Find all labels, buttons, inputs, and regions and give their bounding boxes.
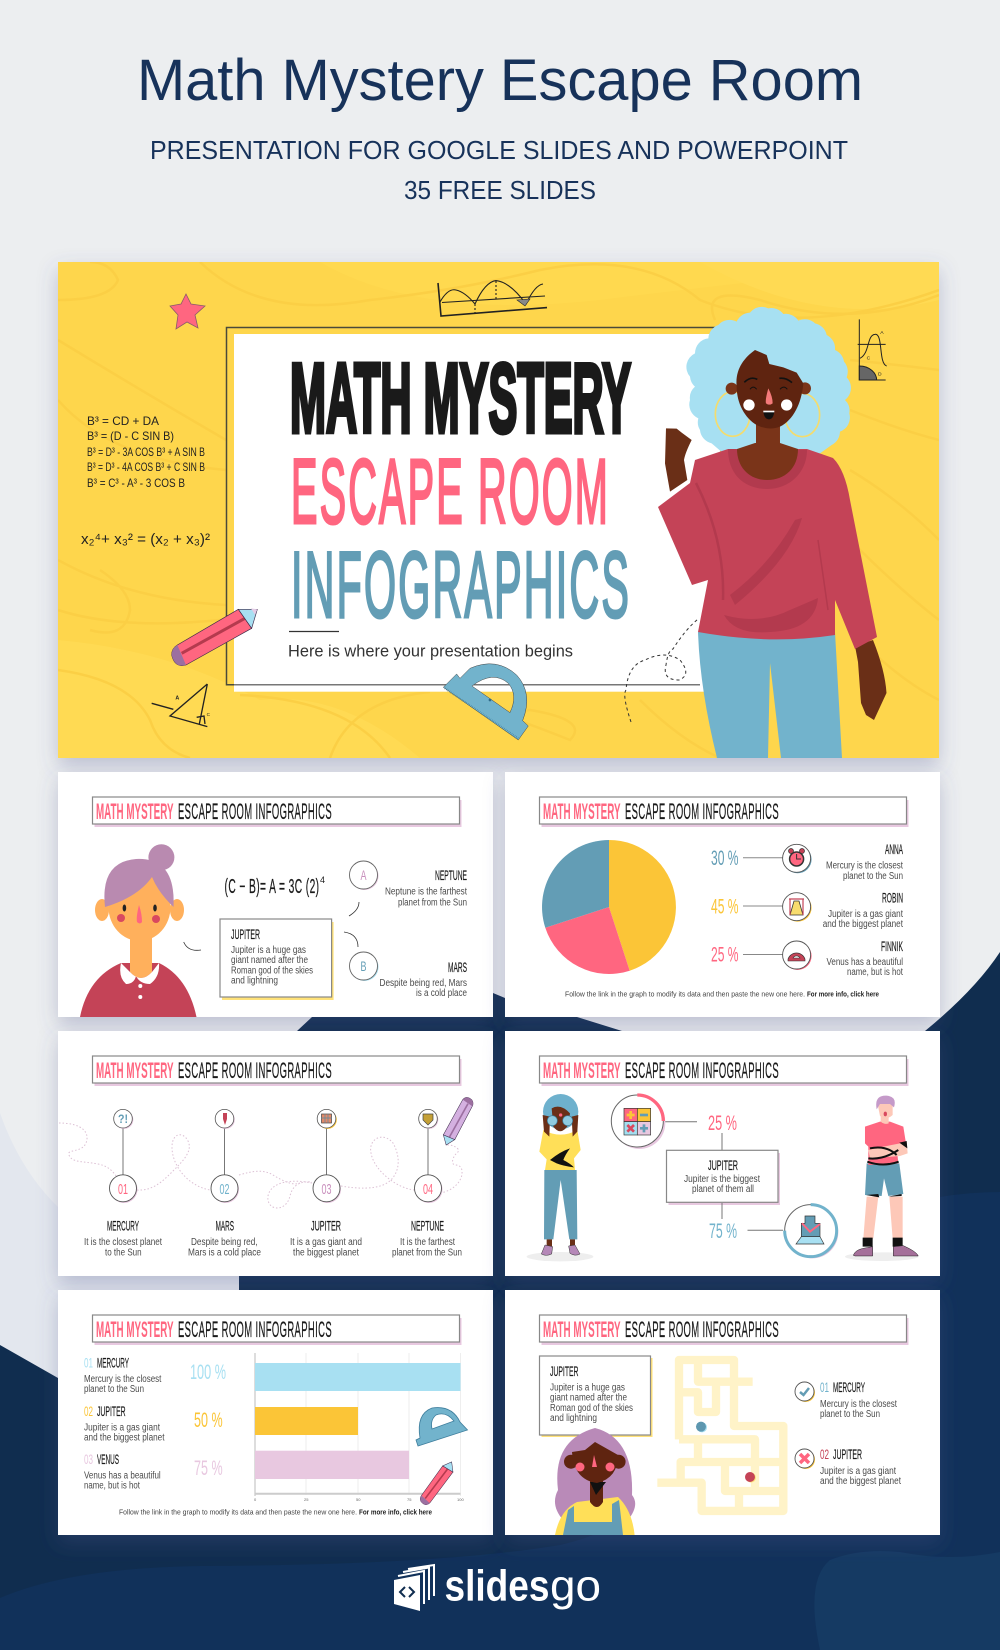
icon: ring with calculator [611,1095,665,1149]
sweater [658,449,877,649]
slide header: ESCAPE ROOM INFOGRAPHICS [178,799,332,824]
timeline item 01 mercury: MERCURY [107,1218,139,1234]
logo: slidesgo [394,1562,601,1611]
timeline item 01 mercury: It is the closest planet [84,1237,162,1248]
logo: slidesgo: slides [444,1562,550,1610]
legend row: anna 30%: 30 % [711,847,738,870]
timeline item 03 jupiter: 03 [322,1181,332,1198]
list item 02 [84,1403,165,1444]
panel: slide 2 pie chart: ANNA [885,841,903,857]
timeline item 01 mercury: to the Sun [105,1248,142,1259]
bar chart: 100 [457,1497,464,1502]
panel: slide 1 formula and character: 4 [320,875,325,885]
icon: protractor small [416,1408,468,1446]
timeline item 02 mars: Mars is a cold place [188,1248,261,1259]
dotted route [59,1123,462,1208]
legend row: anna 30% [711,841,903,882]
pie chart [542,840,676,974]
list item 01: MERCURY [97,1355,129,1371]
slide header: MATH MYSTERY [96,799,174,824]
list item 03: Venus has a beautiful [84,1471,161,1482]
formulas: x₂⁴+ x₃² = (x₂ + x₃)² [81,531,210,548]
text box: jupiter: JUPITER [550,1363,578,1379]
list item 01 with check [795,1379,897,1420]
list item 03: 03 [84,1451,93,1467]
subtitle [150,135,848,205]
text box: jupiter: giant named after the [550,1393,627,1404]
timeline item 04 neptune: It is the farthest [400,1237,455,1248]
list item 01: planet to the Sun [84,1384,144,1395]
footnote: Follow the link in the graph to modify its data and then paste the new one here. [565,990,805,999]
legend row: robin 45%: Jupiter is a gas giant [828,909,903,920]
slide header [92,1315,462,1345]
timeline item 01 mercury: ?! [118,1112,128,1126]
text box: jupiter [220,919,334,1000]
formulas: B³ = D³ - 3A COS B³ + A SIN B [87,445,205,459]
bar chart: 50 [356,1497,361,1502]
list item 01 with check: 01 [820,1379,829,1395]
list item 02: Jupiter is a gas giant [84,1423,160,1434]
icon: pencil [172,608,257,666]
legend row: finnik 25%: 25 % [711,944,738,967]
formulas: B³ = D³ - 4A COS B³ + C SIN B [87,460,205,474]
legend row: finnik 25% [711,938,903,978]
text box: jupiter: JUPITER [231,926,260,942]
frame and white panel [226,328,721,692]
slide header: ESCAPE ROOM INFOGRAPHICS [178,1058,332,1083]
text box: jupiter: and lightning [231,976,278,987]
list item 01 [84,1355,162,1395]
text box: jupiter [540,1356,652,1437]
list item 03: name, but is hot [84,1481,140,1492]
formulas: B³ = CD + DA [87,414,159,428]
formulas: B³ = (D - C SIN B) [87,429,174,443]
icon: purple pencil [430,1095,485,1145]
connector bottom [721,1203,723,1219]
slide header: ESCAPE ROOM INFOGRAPHICS [625,799,779,824]
bar chart: 0 [254,1497,257,1502]
legend row: finnik 25%: name, but is hot [847,967,903,978]
icon: stacked sheets [394,1565,434,1611]
percent values: 75 % [194,1457,223,1480]
legend row: anna 30%: Mercury is the closest [826,861,903,872]
formula: (C − B)= A = 3C (2) [224,876,320,898]
chart doodle: wave graph [438,281,547,316]
timeline item 03 jupiter: It is a gas giant and [290,1237,362,1248]
text box: jupiter: Jupiter is the biggest [684,1174,760,1185]
panel: slide 6 maze [505,1290,940,1535]
text block: neptune: Neptune is the farthest [385,887,467,898]
text block: mars: Despite being red, Mars [380,978,467,989]
slide header [92,1056,462,1086]
legend row: finnik 25%: Venus has a beautiful [826,957,903,968]
icon: triangle doodle [152,684,211,727]
panel: slide 3 timeline [58,1031,493,1276]
character: woman covering eyes [527,1094,593,1261]
slide header: MATH MYSTERY [543,1058,621,1083]
text box: jupiter [666,1150,780,1205]
timeline item 02 mars: 02 [220,1181,230,1198]
panel: slide 2 pie chart: FINNIK [881,938,903,954]
timeline item 02 mars [188,1109,261,1259]
dashed path doodle [625,619,698,722]
list item 02 with cross: 02 [820,1446,829,1462]
logo: slidesgo: go [550,1562,601,1610]
text block: neptune [385,867,467,908]
subtitle: 35 FREE SLIDES [404,175,596,205]
text box: jupiter: Roman god of the skies [231,966,313,977]
list item 03: VENUS [97,1451,119,1467]
icon: triangle doodle: C [207,712,211,717]
character: woman with blue hair [658,307,886,758]
hair and head [665,307,851,492]
bar chart: 25 [304,1497,309,1502]
text block: mars [380,959,467,999]
text box: jupiter: planet of them all [692,1184,754,1195]
75 percent row [709,1220,783,1243]
text box: jupiter: Jupiter is a huge gas [550,1383,625,1394]
icon: protractor [443,664,528,740]
list item 01 with check: Mercury is the closest [820,1399,897,1410]
timeline item 04 neptune: planet from the Sun [392,1248,462,1259]
75 percent row: 75 % [709,1220,737,1243]
subtitle: PRESENTATION FOR GOOGLE SLIDES AND POWERPOINT [150,135,848,165]
panel: slide 2 pie chart [505,772,940,1017]
slide header: MATH MYSTERY [543,799,621,824]
list item 01 with check: MERCURY [833,1379,865,1395]
footnote: For more info, click here [807,990,879,999]
footnote: For more info, click here [359,1508,432,1517]
character: woman with bun [80,844,196,1017]
panel: slide 1 formula and character: MARS [448,959,467,975]
bar chart: 75 [407,1497,412,1502]
icon: ring with dress [785,1205,838,1258]
percent values [190,1361,226,1480]
legend row: robin 45%: and the biggest planet [823,919,903,930]
icon: triangle doodle: A [175,695,179,701]
list item 03 [84,1451,161,1492]
25 percent row: 25 % [708,1112,737,1135]
slide header [540,1315,908,1345]
legend row: robin 45% [711,890,903,930]
title: Math Mystery Escape Room [137,48,863,113]
bar chart [254,1353,464,1502]
slide header: MATH MYSTERY [543,1317,621,1342]
text box: jupiter: Jupiter is a huge gas [231,945,306,956]
chart doodle: bell curve: D [878,371,882,377]
list item 02: JUPITER [97,1403,126,1419]
chart doodle: bell curve: C [867,355,871,361]
text box: jupiter: JUPITER [708,1157,738,1173]
panel: main title slide [58,262,939,758]
slide header: ESCAPE ROOM INFOGRAPHICS [178,1317,332,1342]
slide header: MATH MYSTERY [96,1058,174,1083]
timeline item 03 jupiter: JUPITER [311,1218,341,1234]
circle B: B [360,958,366,974]
panel: slide 1 formula and character [58,772,493,1017]
panel: slide 1 formula and character: NEPTUNE [435,867,467,883]
slide header [540,1056,908,1086]
timeline item 03 jupiter: the biggest planet [293,1248,359,1259]
panel: slide 2 pie chart: ROBIN [882,890,903,906]
timeline item 04 neptune: 04 [423,1181,433,1198]
slide header: MATH MYSTERY [96,1317,174,1342]
footnote: Follow the link in the graph to modify its data and then paste the new one here. [119,1508,357,1517]
lower arm and hand [855,640,886,720]
panel: slide 4 percentages [505,1031,940,1276]
text box: jupiter: and lightning [550,1413,597,1424]
percent values: 50 % [194,1409,223,1432]
timeline item 04 neptune: NEPTUNE [411,1218,444,1234]
slide header [92,797,462,827]
formulas: B³ = C³ - A³ - 3 COS B [87,476,185,490]
circle B [350,952,378,981]
text box: jupiter: Roman god of the skies [550,1403,633,1414]
timeline item 01 mercury: 01 [118,1181,128,1198]
list item 01 with check: planet to the Sun [820,1409,880,1420]
icon: star [170,294,205,329]
list item 02 with cross: Jupiter is a gas giant [820,1466,896,1477]
percent values: 100 % [190,1361,226,1384]
chart doodle: bell curve: A [880,330,884,336]
list item 02 with cross: JUPITER [833,1446,862,1462]
list item 02: 02 [84,1403,93,1419]
formulas [81,414,210,548]
timeline item 03 jupiter [290,1109,362,1259]
pants [698,632,842,758]
panel: slide 5 bar chart [58,1290,493,1535]
circle A: A [360,867,367,883]
timeline item 02 mars: MARS [216,1218,234,1234]
character: man with crossed arms [845,1096,918,1261]
connector top [721,1133,723,1150]
slide header: ESCAPE ROOM INFOGRAPHICS [625,1317,779,1342]
list item 01: 01 [84,1355,93,1371]
circle A [350,861,378,890]
25 percent row [663,1112,737,1135]
timeline item 02 mars: Despite being red, [191,1237,258,1248]
legend row: robin 45%: 45 % [711,895,738,918]
legend row: anna 30%: planet to the Sun [843,871,903,882]
timeline item 04 neptune [392,1109,462,1259]
subtitle text: Here is where your presentation begins [288,642,573,660]
icon: pencil small [411,1462,463,1506]
slide header: ESCAPE ROOM INFOGRAPHICS [625,1058,779,1083]
text block: mars: is a cold place [416,988,467,999]
timeline item 01 mercury [84,1109,162,1259]
text block: neptune: planet from the Sun [398,897,467,908]
maze [657,1360,783,1511]
character: girl with purple hair [555,1428,635,1535]
chart doodle: bell curve [858,319,887,380]
list item 02 with cross [795,1446,901,1487]
text box: jupiter: giant named after the [231,955,308,966]
list item 02: and the biggest planet [84,1433,165,1444]
slide header [540,797,908,827]
list item 02 with cross: and the biggest planet [820,1476,901,1487]
list item 01: Mercury is the closest [84,1374,162,1385]
